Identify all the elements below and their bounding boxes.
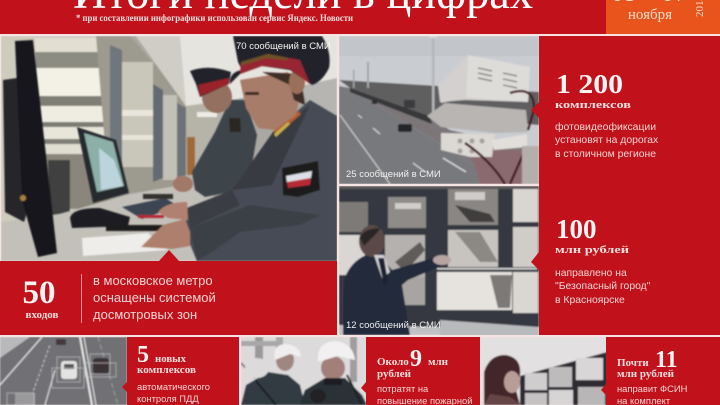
- description: направит ФСИН: [617, 383, 687, 394]
- description: потратят на: [377, 383, 429, 394]
- desk: [1, 180, 215, 261]
- photo: police officers at monitors: [1, 36, 337, 261]
- photo: traffic control: [0, 337, 127, 405]
- unit: входов: [26, 309, 59, 321]
- description: оснащены системой: [93, 290, 216, 305]
- number 100: 100: [556, 214, 596, 244]
- notch arrows: [531, 102, 539, 118]
- description: направлено на: [555, 268, 627, 279]
- face: [240, 72, 300, 130]
- number 5: 5: [137, 342, 149, 368]
- notch arrow: [601, 384, 606, 395]
- header band: [0, 0, 720, 34]
- officer: [343, 254, 446, 335]
- date box: [606, 0, 720, 34]
- background officer: [192, 100, 257, 197]
- label: 25 mentions: 25 сообщений в СМИ: [346, 169, 441, 180]
- lead-in text: Около: [377, 356, 409, 368]
- unit: млн рублей: [555, 244, 630, 256]
- description: в Красноярске: [555, 295, 625, 306]
- panel: almost 11 million: [601, 337, 720, 405]
- unit: комплексов: [555, 99, 631, 111]
- phone and keyboard: [70, 208, 130, 228]
- unit: комплексов: [137, 364, 196, 376]
- notch arrow: [361, 382, 366, 393]
- notch arrow: [159, 250, 179, 261]
- left monitor: [3, 78, 26, 222]
- panel: 5 new complexes: [122, 337, 239, 405]
- description: установят на дорогах: [555, 135, 659, 146]
- notch arrow: [122, 382, 127, 392]
- label: 70 mentions: 70 сообщений в СМИ: [236, 41, 331, 52]
- hands: [158, 202, 188, 220]
- lead-in text: Почти: [617, 357, 649, 369]
- photo: officer and video wall: [339, 186, 539, 336]
- cap: [230, 36, 330, 85]
- description: автоматического: [137, 381, 210, 392]
- photo: woman at monitoring wall: [481, 337, 607, 405]
- footnote: * при составлении инфографики использован сервис Яндекс. Новости: [76, 13, 353, 24]
- screens: [339, 202, 368, 232]
- number 1 200: 1 200: [556, 69, 623, 99]
- small monitor: [77, 127, 129, 203]
- foreground officer: [185, 100, 337, 261]
- photo: firefighters: [241, 337, 367, 405]
- description: в столичном регионе: [555, 149, 656, 160]
- number 11: 11: [655, 347, 678, 373]
- lead-in text: рублей: [377, 368, 412, 380]
- description: контроля ПДД: [137, 393, 199, 404]
- unit: новых: [155, 353, 186, 365]
- lead-in text: млн рублей: [617, 368, 675, 380]
- camera housing: [438, 88, 529, 103]
- description: в московское метро: [93, 273, 213, 288]
- paper: [82, 233, 168, 256]
- panel: right column: [531, 36, 720, 335]
- month: ноября: [628, 7, 672, 23]
- description: "Безопасный город": [555, 281, 651, 292]
- number 50: 50: [22, 275, 56, 311]
- panel: about 9 million: [361, 337, 480, 405]
- description: фотовидеофиксации: [555, 121, 656, 133]
- description: досмотровых зон: [93, 307, 197, 322]
- lead-in text: млн: [428, 356, 449, 368]
- photo: camera on highway: [339, 36, 539, 184]
- number 9: 9: [410, 346, 422, 372]
- panel: 50 entrances: [0, 250, 337, 335]
- label: 12 mentions: 12 сообщений в СМИ: [346, 320, 441, 331]
- shoulder patch: [282, 161, 320, 197]
